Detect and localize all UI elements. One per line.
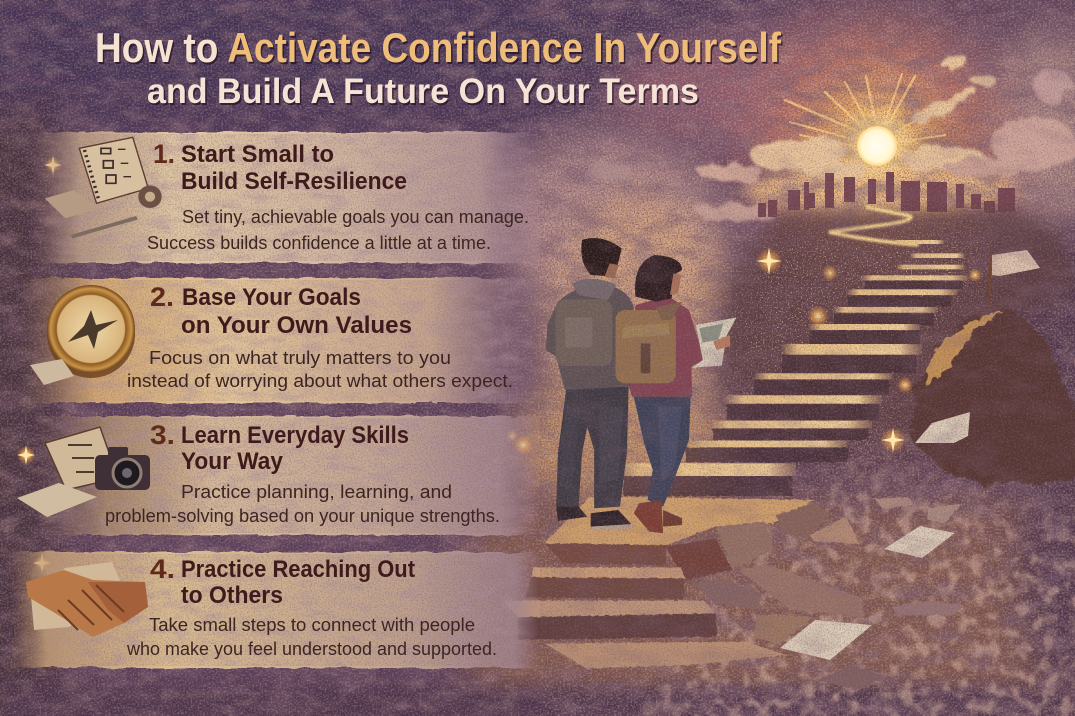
sun and rays (785, 74, 950, 178)
body 1: Success builds confidence a little at a time. (147, 232, 491, 253)
heading 2: Base Your Goals (182, 284, 361, 311)
title: and Build A Future On Your Terms (147, 72, 699, 111)
heading 3: Your Way (181, 448, 284, 475)
scattered papers (780, 412, 970, 660)
body 4: Take small steps to connect with people (149, 614, 475, 635)
man (546, 238, 634, 531)
city skyline (758, 172, 1015, 217)
heading 1: Start Small to (181, 141, 334, 168)
hill with flag (905, 250, 1075, 485)
icon: journal and camera (17, 427, 150, 517)
title: and Build A Future On Your Terms (148, 74, 700, 113)
body 3: problem-solving based on your unique strengths. (105, 505, 500, 526)
heading 3: 3. (150, 420, 175, 450)
body 2: instead of worrying about what others expect. (127, 370, 513, 391)
heading 1: Build Self-Resilience (181, 168, 407, 195)
heading 1: 1. (153, 139, 175, 169)
heading 4: 4. (150, 554, 175, 584)
woman (616, 255, 737, 533)
icon: notebook and pencil (45, 137, 162, 238)
body 1: Set tiny, achievable goals you can manage. (182, 206, 529, 227)
heading 3: Learn Everyday Skills (181, 422, 409, 449)
couple with backpacks (546, 238, 737, 533)
body 4 (126, 614, 497, 659)
title: How to Activate Confidence In Yourself (95, 24, 782, 71)
panel 3: skills (17, 416, 545, 535)
flag (988, 250, 1040, 306)
sparkles (17, 157, 982, 571)
heading 2 (150, 282, 412, 339)
map (692, 317, 737, 368)
icon: compass (30, 285, 135, 385)
clouds (586, 51, 1075, 222)
heading 4: Practice Reaching Out (181, 556, 415, 583)
heading 3 (150, 420, 409, 475)
glowing winding path (829, 207, 917, 245)
sun disc (17, 126, 905, 573)
heading 2: 2. (150, 282, 174, 312)
body 4: who make you feel understood and supported. (126, 638, 497, 659)
heading 1 (153, 139, 407, 195)
title: How to Activate Confidence In Yourself (96, 26, 783, 73)
rocky foreground with lower stone steps (505, 456, 1075, 716)
heading 4 (150, 554, 415, 609)
panel 2: values (20, 278, 545, 403)
heading 4: to Others (181, 582, 283, 609)
panel 1: start small (30, 132, 545, 263)
scene grain overlay (540, 0, 1075, 716)
band 2 (20, 278, 545, 403)
icon: handshake (26, 562, 148, 637)
body 3 (105, 481, 500, 526)
body 1 (147, 206, 529, 253)
heading 2: on Your Own Values (181, 312, 412, 339)
panel 4: reaching out (10, 552, 545, 668)
title (95, 24, 783, 113)
band 3 (35, 416, 545, 535)
staircase (620, 240, 968, 496)
body 2: Focus on what truly matters to you (149, 347, 451, 368)
band 4 (10, 552, 545, 668)
body 2 (127, 347, 513, 391)
band 1 (30, 132, 545, 263)
body 3: Practice planning, learning, and (181, 481, 452, 502)
dark hillside (706, 188, 1075, 490)
